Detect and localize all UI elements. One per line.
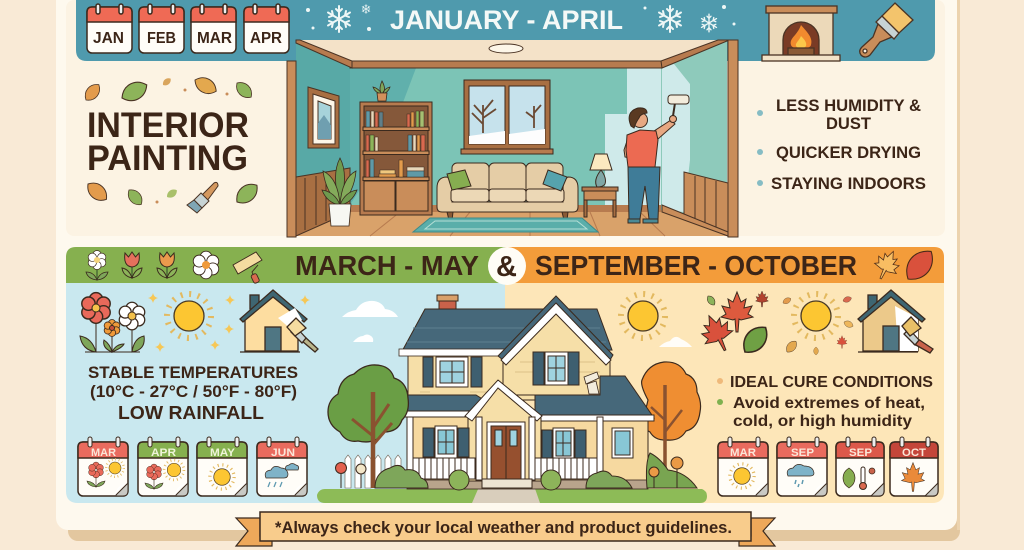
text: spring conditions: LOW RAINFALL: [118, 403, 264, 423]
upper storey: [408, 350, 604, 400]
band: March - May: MARCH - MAY: [295, 250, 479, 281]
list: benefits of winter painting: STAYING INDOORS: [771, 175, 926, 193]
calendar: October: [890, 437, 938, 496]
fence: [345, 455, 401, 488]
banner: January - April: [76, 0, 935, 61]
right post: [728, 40, 738, 237]
list: benefits of winter painting: [757, 97, 926, 193]
main roof: [400, 309, 612, 355]
icon: fireplace: [762, 6, 840, 61]
calendar: September alternate: [836, 437, 884, 496]
left tree: [328, 365, 408, 488]
painter with roller: [624, 95, 689, 223]
panel: spring: [66, 283, 507, 503]
panel: fall: [505, 283, 944, 503]
badge: ampersand: &: [496, 251, 517, 283]
heading: Interior Painting: [87, 106, 249, 178]
illustration: living room being painted: [287, 40, 738, 237]
spring icons: [80, 290, 318, 352]
calendar: March: MAR: [91, 447, 116, 459]
lower roofs: [395, 376, 654, 421]
icon: sun: [167, 294, 211, 338]
calendar: March: [718, 437, 768, 496]
siding lines: [420, 362, 600, 392]
floor plant: [322, 158, 357, 226]
icon: paint brush: [860, 3, 913, 57]
text: spring conditions: [88, 363, 298, 423]
plant on bookcase: [373, 81, 390, 101]
icon: house being painted: [240, 290, 318, 352]
icon: snowflakes: [306, 4, 736, 32]
chimney: [437, 295, 458, 321]
list: benefits of winter painting: LESS HUMIDITY &: [776, 97, 921, 115]
band: September - October: [505, 244, 944, 286]
ribbon: footnote: [236, 512, 775, 546]
lower storey: [407, 415, 648, 481]
lamp and side table: [582, 154, 618, 217]
calendar: May: MAY: [210, 447, 236, 459]
calendar: May: [197, 437, 247, 496]
front door: [487, 422, 525, 479]
calendar: June: JUN: [271, 447, 295, 459]
title: January - April: JANUARY - APRIL: [390, 5, 623, 35]
porch rails and columns: [407, 417, 603, 488]
front gable: [503, 303, 610, 395]
calendars: Jan to Apr: [87, 4, 289, 53]
icon: paint roller: [233, 252, 262, 284]
heading: Interior Painting: PAINTING: [87, 139, 248, 178]
sparkles: [148, 293, 310, 352]
band leaves: [870, 244, 939, 286]
badge: ampersand: [488, 247, 526, 285]
icon: house being repainted: [858, 290, 933, 353]
text: fall conditions: [717, 374, 933, 430]
upper windows: [423, 352, 579, 387]
list: benefits of winter painting: QUICKER DRYING: [776, 144, 921, 162]
band: March - May: [66, 247, 505, 284]
paint roller on facade: [584, 372, 599, 394]
left wainscot: [296, 168, 350, 236]
left wall: [296, 42, 350, 236]
icon: flowers: [80, 293, 145, 352]
calendar labels: JAN: [93, 30, 124, 47]
calendar: September: [777, 437, 827, 496]
ceiling lamp: [489, 44, 523, 53]
leaves around heading: [81, 74, 262, 208]
ground: [317, 489, 707, 503]
calendar: April: APR: [151, 447, 176, 459]
sofa: [437, 163, 578, 220]
rug: [413, 218, 598, 232]
calendar labels: FEB: [147, 30, 176, 47]
icon: autumn leaves: [695, 291, 773, 358]
shrubs and flowers: [336, 453, 697, 490]
calendars: spring: [78, 437, 307, 496]
calendar: March: [78, 437, 128, 496]
lower windows: [423, 426, 633, 459]
window: [461, 80, 553, 154]
text: fall conditions: cold, or high humidity: [733, 413, 912, 430]
text: spring conditions: (10°C - 27°C / 50°F - 80°F): [90, 382, 297, 401]
calendar: March: MAR: [730, 447, 756, 459]
calendar: October: OCT: [902, 447, 926, 459]
back wall: [350, 68, 661, 210]
calendar labels: MAR: [197, 30, 232, 47]
left post: [287, 61, 296, 237]
right wall: [661, 40, 727, 236]
right tree: [642, 362, 701, 482]
illustration: house: [317, 295, 707, 503]
ceiling: [296, 40, 728, 62]
baseboard: [350, 205, 661, 212]
text: fall conditions: IDEAL CURE CONDITIONS: [730, 374, 933, 391]
picture: [308, 87, 339, 148]
text: fall conditions: Avoid extremes of heat,: [733, 395, 925, 412]
band: September - October: SEPTEMBER - OCTOBER: [535, 250, 857, 281]
ribbon: footnote: *Always check your local weather and product guidelines.: [275, 518, 732, 537]
text: spring conditions: STABLE TEMPERATURES: [88, 363, 298, 382]
foundation: [407, 480, 648, 489]
right wainscot: [662, 172, 728, 236]
icon: sun: [621, 294, 665, 338]
floor: [296, 210, 727, 236]
calendar: June: [257, 437, 307, 496]
calendar labels: APR: [250, 30, 282, 47]
heading: Interior Painting: INTERIOR: [87, 106, 249, 145]
calendar: September: SEP: [791, 447, 814, 459]
calendar labels: [93, 30, 282, 47]
clouds: [342, 301, 692, 347]
front path: [472, 480, 540, 503]
calendars: fall: [718, 437, 938, 496]
card shadow: [68, 500, 960, 541]
icon: sun and falling leaves: [782, 294, 854, 355]
porch gable: [465, 380, 542, 481]
painted patch: [605, 68, 662, 210]
list: benefits of winter painting: DUST: [826, 115, 871, 133]
bookcase: [360, 102, 432, 215]
calendar: September alternate: SEP: [849, 447, 872, 459]
fall icons: [621, 290, 933, 358]
calendar: April: [138, 437, 188, 496]
crown molding: [296, 40, 727, 68]
band flowers: [86, 250, 219, 280]
icon: small brush: [187, 182, 218, 213]
